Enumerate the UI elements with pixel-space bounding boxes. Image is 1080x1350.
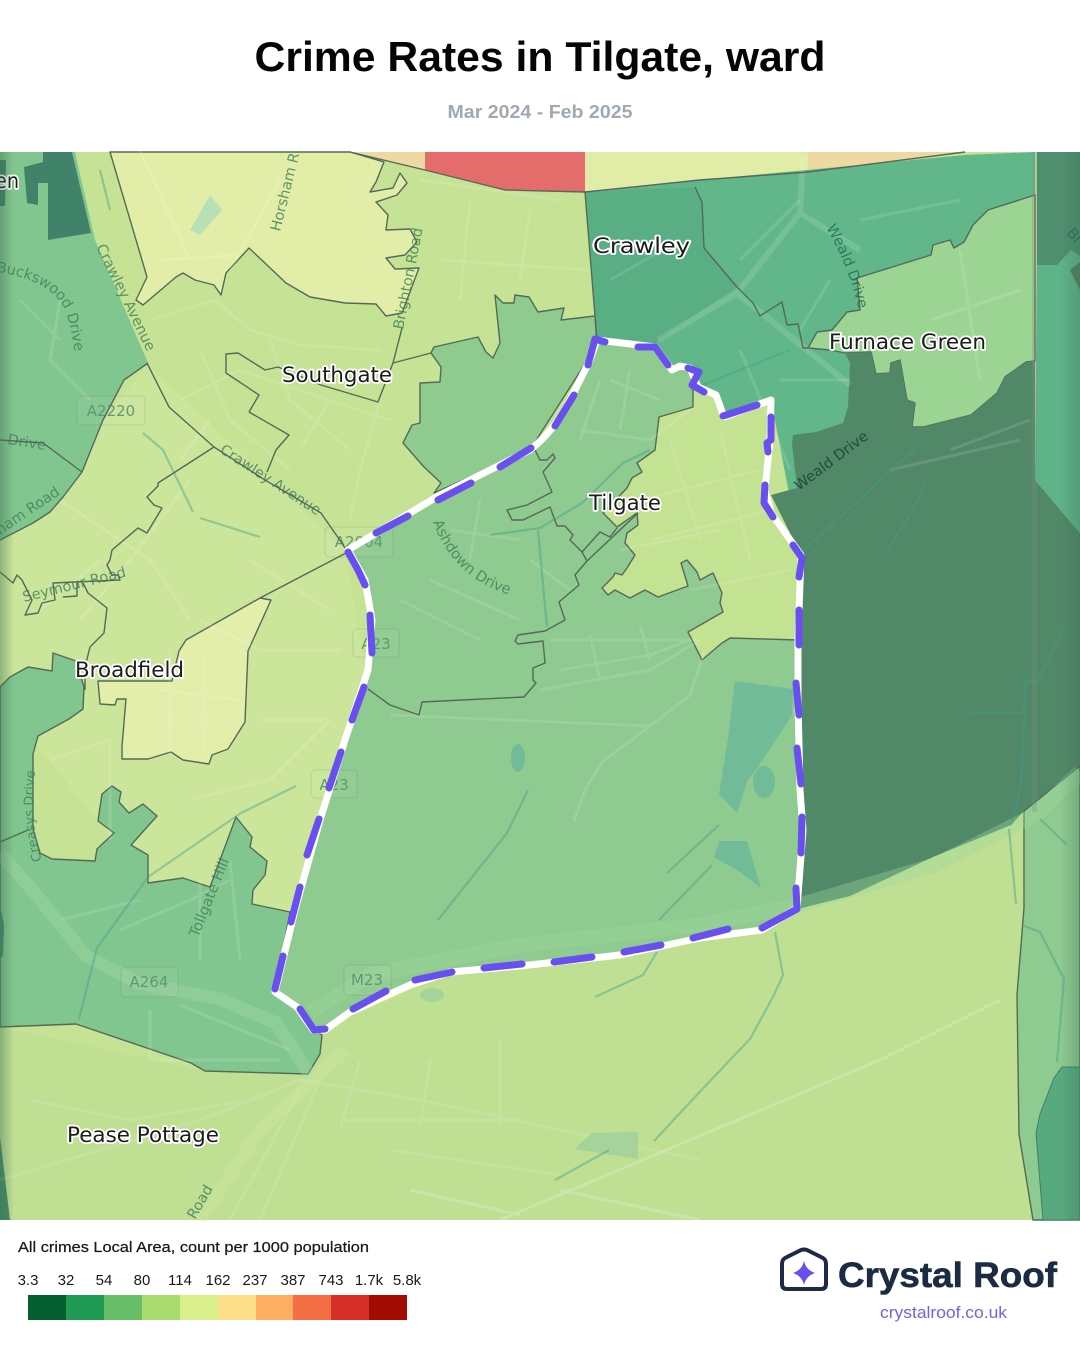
place labels: Crawley bbox=[593, 234, 690, 258]
legend colour scale bbox=[28, 1295, 407, 1320]
legend values: 80 bbox=[134, 1272, 150, 1289]
area: dark south-west edge slivers bbox=[0, 1137, 10, 1220]
legend values: 387 bbox=[280, 1272, 306, 1289]
area: Tilgate ward fill bbox=[275, 340, 803, 1030]
legend values: 5.8k bbox=[393, 1272, 422, 1289]
road labels: Creasys Drive bbox=[24, 771, 41, 862]
road labels: Weald Drive bbox=[828, 223, 866, 308]
ward boundaries inside Tilgate bbox=[368, 450, 638, 715]
legend values: 1.7k bbox=[355, 1272, 384, 1289]
place labels: Tilgate bbox=[588, 491, 661, 515]
ward boundaries Crawley bbox=[350, 152, 965, 348]
title: Crime Rates in Tilgate, ward bbox=[254, 33, 826, 80]
road labels: Brighton Road bbox=[391, 227, 427, 331]
ward outline: purple dashes bbox=[275, 339, 802, 1030]
legend title: All crimes Local Area, count per 1000 population bbox=[18, 1239, 369, 1256]
road shields: A23 bbox=[319, 776, 349, 794]
legend values: 54 bbox=[96, 1272, 112, 1289]
area: south-east dark green ward bbox=[1036, 1067, 1080, 1220]
area: far right dark notch bbox=[1070, 262, 1080, 290]
road shields: A23 bbox=[361, 635, 391, 653]
area: far north-west dark sliver bbox=[0, 160, 6, 206]
area: far right green strip bbox=[1035, 250, 1080, 533]
logo: Crystal Roof bbox=[782, 1250, 1057, 1322]
legend values: 162 bbox=[205, 1272, 231, 1289]
area: green ward above Tilgate bbox=[403, 295, 597, 493]
area: top tan ward left bbox=[350, 152, 425, 170]
legend values: 743 bbox=[318, 1272, 344, 1289]
icon: house with star bbox=[782, 1250, 826, 1289]
legend values: 3.3 bbox=[18, 1272, 38, 1289]
road labels: Seymour Road bbox=[21, 565, 128, 606]
street network bbox=[0, 150, 1030, 1220]
road labels: Weald Drive bbox=[792, 429, 872, 494]
area: Crawley town centre darker bbox=[585, 187, 737, 347]
road labels: Crawley Avenue bbox=[92, 242, 158, 354]
map base: light green areas bbox=[0, 152, 1080, 1220]
place labels: Southgate bbox=[282, 363, 392, 387]
road labels bbox=[0, 151, 1080, 1222]
legend bbox=[18, 1239, 422, 1320]
ward outline: white base bbox=[275, 340, 803, 1030]
area: Crawley and north-east wards bbox=[585, 152, 1035, 600]
road: A23 southern bbox=[200, 1050, 345, 1220]
road: A264 dual carriageway bbox=[0, 853, 310, 1075]
area: north-west pale yellow ward bbox=[110, 152, 419, 316]
road: M23 motorway bbox=[310, 772, 1080, 1012]
legend values: 114 bbox=[168, 1272, 192, 1289]
choropleth map bbox=[0, 151, 1080, 1224]
area: far right north dark patch bbox=[1037, 152, 1080, 265]
place labels bbox=[0, 169, 986, 1147]
area: Tilgate Forest dark green bbox=[771, 352, 1080, 908]
ward boundaries west side bbox=[0, 328, 431, 842]
area: Furnace Green bbox=[808, 195, 1035, 427]
subtitle: date range: Mar 2024 - Feb 2025 bbox=[448, 102, 632, 122]
legend values: 32 bbox=[58, 1272, 74, 1289]
map edge shading bbox=[0, 152, 14, 1220]
area: south-west green ward bbox=[0, 653, 322, 1074]
area: south-east green strip bbox=[1017, 766, 1080, 1220]
place labels: Broadfield bbox=[75, 658, 184, 682]
road labels: Road bbox=[185, 1182, 217, 1222]
area: north-west dark green patch bbox=[24, 152, 91, 240]
road shields: A2004 bbox=[335, 533, 383, 551]
road shields: M23 bbox=[351, 971, 383, 989]
road labels: Crawley Avenue bbox=[217, 442, 324, 519]
area: Broadfield pale yellow ward bbox=[98, 598, 271, 764]
place labels: Pease Pottage bbox=[67, 1123, 219, 1147]
road labels: Drive bbox=[6, 432, 47, 454]
road labels: Ashdown Drive bbox=[433, 522, 510, 594]
road shields: A264 bbox=[130, 973, 168, 991]
area: Broadfield surrounding bbox=[0, 365, 368, 912]
legend values: 237 bbox=[242, 1272, 268, 1289]
area: top tan ward right bbox=[808, 152, 965, 172]
logo wordmark: Crystal Roof bbox=[838, 1256, 1057, 1295]
area: top red ward bbox=[425, 152, 585, 192]
logo website: crystalroof.co.uk bbox=[880, 1304, 1008, 1322]
road shields bbox=[77, 396, 399, 997]
road labels: Tollgate Hill bbox=[186, 856, 233, 940]
area: south countryside bbox=[0, 811, 1033, 1220]
place labels: Furnace Green bbox=[829, 330, 986, 354]
road shields: A2220 bbox=[87, 402, 135, 420]
area: top pale ward bbox=[585, 152, 808, 192]
area: Tilgate north light ward bbox=[602, 387, 801, 660]
area: west green ward bbox=[0, 152, 148, 540]
legend values bbox=[18, 1272, 422, 1289]
water: Tilgate lake and streams bbox=[79, 170, 1067, 1180]
road labels: Horsham R bbox=[268, 151, 303, 233]
